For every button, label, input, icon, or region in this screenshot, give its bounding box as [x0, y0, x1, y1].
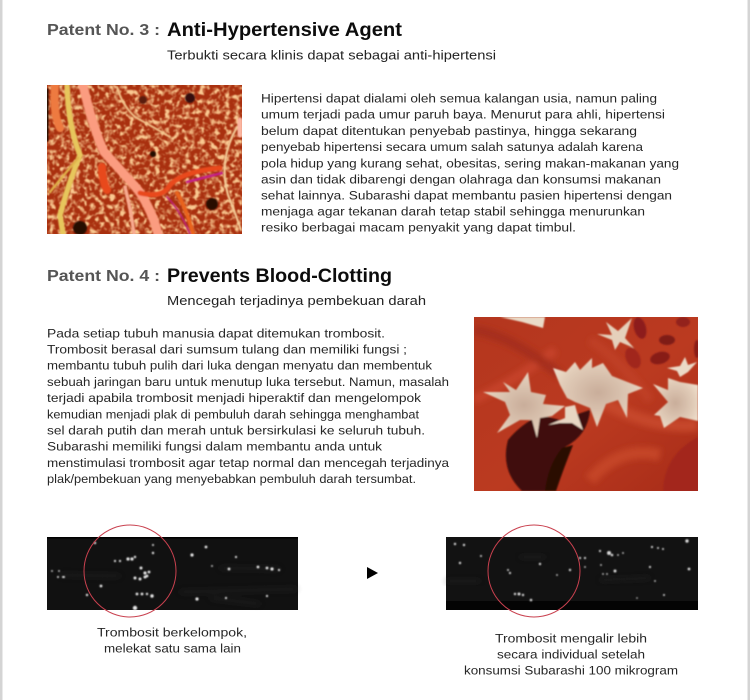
caption left: [97, 626, 247, 656]
text block: hipertensi: penyebab hipertensi secara umum salah satunya adalah karena: [261, 140, 643, 154]
platelet small right: [667, 357, 697, 377]
caption right: konsumsi Subarashi 100 mikrogram: [464, 664, 678, 678]
red cells: [633, 317, 647, 340]
heading: patent no. 4: Mencegah terjadinya pembekuan darah: [167, 293, 426, 308]
red circle highlight left: [84, 525, 176, 617]
caption right: secara individual setelah: [497, 648, 645, 662]
caption right: Trombosit mengalir lebih: [495, 632, 647, 646]
heading: patent no. 4: Prevents Blood-Clotting: [167, 266, 392, 287]
caption right: [464, 632, 678, 678]
bright platelet spots: [454, 539, 690, 601]
text block: trombosit: plak/pembekuan yang menyebabkan pembuluh darah tersumbat.: [47, 472, 416, 486]
heading: patent no. 3: [47, 20, 496, 62]
platelet left: [483, 372, 565, 438]
microscopy image: clumped platelets: [47, 537, 298, 610]
heading: patent no. 4: [47, 266, 426, 308]
heading: patent no. 3: Terbukti secara klinis dapat sebagai anti-hipertensi: [167, 48, 496, 62]
text block: trombosit: sel darah putih dan merah untuk bersirkulasi ke seluruh tubuh.: [47, 424, 425, 438]
text block: hipertensi: umum terjadi pada umur paruh baya. Menurut para ahli, hipertensi: [261, 108, 665, 122]
text block: hipertensi: asin dan tidak dibarengi dengan olahraga dan konsumsi makanan: [261, 172, 661, 186]
text block: hipertensi: menjaga agar tekanan darah tetap stabil sehingga menurunkan: [261, 204, 645, 218]
text block: trombosit: Trombosit berasal dari sumsum tulang dan memiliki fungsi ;: [47, 342, 407, 356]
text block: trombosit: sebuah jaringan baru untuk menutup luka tersebut. Namun, masalah: [47, 375, 449, 389]
text block: trombosit: menstimulasi trombosit agar tetap normal dan mencegah terjadinya: [47, 456, 449, 470]
image: blood vessel network: [47, 85, 242, 235]
platelet attached: [548, 405, 583, 430]
image: clotting platelets: [474, 316, 700, 491]
text block: trombosit: membantu tubuh pulih dari luka dengan menyatu dan membentuk: [47, 358, 433, 372]
platelet top: [597, 318, 634, 350]
heading: patent no. 3: Patent No. 3 :: [47, 22, 160, 39]
text block: trombosit: Pada setiap tubuh manusia dapat ditemukan trombosit.: [47, 326, 385, 340]
caption left: Trombosit berkelompok,: [97, 626, 247, 640]
heading: patent no. 3: Anti-Hypertensive Agent: [167, 20, 403, 41]
text block: trombosit: kemudian menjadi plak di pembuluh darah sehingga menghambat: [47, 408, 420, 422]
text block: hipertensi: pola hidup yang kurang sehat, obesitas, sering makan-makanan yang: [261, 156, 679, 170]
dark vessel opening: [506, 410, 590, 491]
bright platelet spots: [51, 542, 280, 610]
microscopy image: separated platelets: [446, 537, 698, 610]
heading: patent no. 4: Patent No. 4 :: [47, 268, 160, 285]
platelet right: [653, 378, 698, 428]
text block: trombosit: Subarashi memiliki fungsi dalam membantu anda untuk: [47, 440, 383, 454]
arrow: [367, 567, 378, 579]
platelet top left: [500, 317, 545, 328]
text block: hipertensi: Hipertensi dapat dialami oleh semua kalangan usia, namun paling: [261, 92, 657, 106]
text block: hipertensi: sehat lainnya. Subarashi dapat membantu pasien hipertensi dengan: [261, 188, 672, 202]
text block: trombosit: [47, 326, 449, 486]
red circle highlight right: [488, 525, 580, 617]
text block: hipertensi: belum dapat ditentukan penyebab pastinya, hingga sekarang: [261, 124, 637, 138]
text block: hipertensi: [261, 92, 679, 234]
platelet cluster: [553, 358, 643, 427]
text block: hipertensi: resiko berbagai macam penyakit yang dapat timbul.: [261, 220, 576, 234]
caption left: melekat satu sama lain: [104, 642, 241, 656]
text block: trombosit: terjadi apabila trombosit menjadi hiperaktif dan mengelompok: [47, 391, 422, 405]
